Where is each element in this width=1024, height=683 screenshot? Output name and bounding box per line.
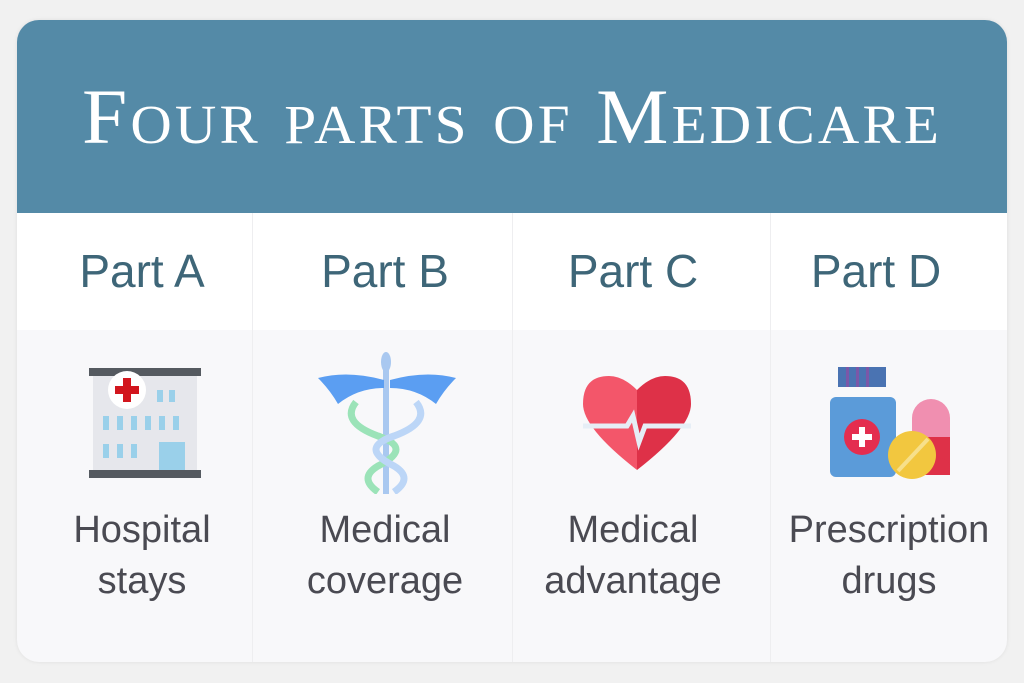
label: Part A: Part A xyxy=(79,245,205,297)
text: Medical coverage xyxy=(307,509,463,602)
text: Prescription drugs: Prescription xyxy=(789,509,989,551)
label: Part D: Part D xyxy=(811,245,941,297)
icon: hospital xyxy=(89,368,201,478)
column: Part D xyxy=(789,245,989,602)
text: Hospital stays: stays xyxy=(98,560,186,602)
text: Hospital stays: Hospital xyxy=(73,509,211,551)
text: Medical coverage: Medical xyxy=(320,509,450,551)
text: Prescription drugs: drugs xyxy=(841,560,937,602)
label: Part C: Part C xyxy=(568,245,698,297)
column: Part A xyxy=(73,245,211,602)
text: Medical advantage: Medical xyxy=(568,509,698,551)
text: Hospital stays xyxy=(73,509,211,602)
text: Prescription drugs xyxy=(789,509,989,602)
text: Medical advantage xyxy=(544,509,722,602)
icon: heart xyxy=(583,376,691,470)
title: Four parts of Medicare xyxy=(82,73,942,160)
icon: caduceus xyxy=(318,352,456,494)
column: Part C xyxy=(544,245,722,602)
text: Medical coverage: coverage xyxy=(307,560,463,602)
icon: pills xyxy=(830,367,950,479)
header band xyxy=(17,20,1007,213)
text: Medical advantage: advantage xyxy=(544,560,722,602)
column: Part B xyxy=(307,245,463,602)
label: Part B: Part B xyxy=(321,245,449,297)
